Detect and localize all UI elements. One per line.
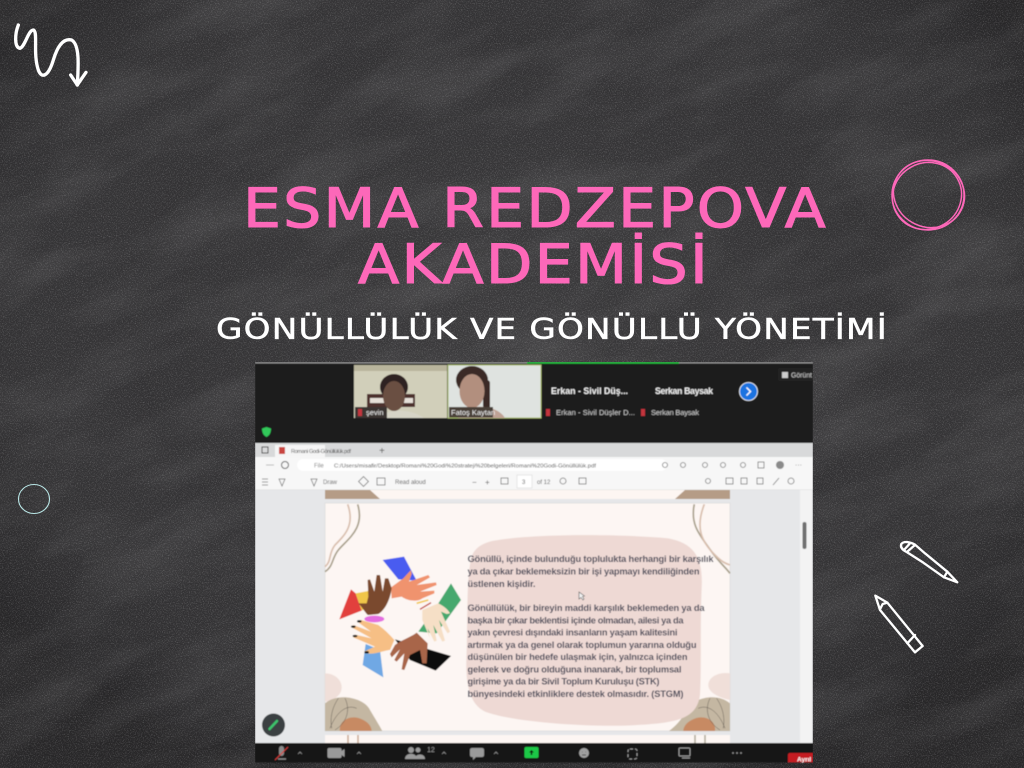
slide definition text: başka bir çıkar beklentisi içinde olmadan, ailesi ya da [468,616,684,626]
leave button: Ayrıl [797,756,811,764]
icon: small teal circle [18,484,50,514]
participant video: sevin [354,365,447,418]
icon: security shield [262,427,271,437]
screenshot: video meeting [255,362,813,764]
slide definition text: düşünülen bir hedefe ulaşmak için, yalnızca içinden [468,652,688,662]
pdf toolbar: − [472,478,477,487]
icon: camera [328,748,344,758]
pdf toolbar: Draw [323,480,338,486]
title: AKADEMİSİ [358,233,710,296]
previous pdf page [325,490,730,499]
icon: muted microphone [275,746,288,760]
participant tile: Serkan Baysak: Serkan Baysak [655,386,713,396]
browser address bar [255,457,813,473]
slide definition text: yakın çevresi dışındaki insanların yaşam kalitesini [468,628,678,638]
slide definition text: ya da çıkar beklemeksizin bir işi yapmayı kendiliğinden [468,566,700,576]
icon: circle of hands [339,557,461,677]
icon: participants: 12 [427,747,435,754]
icon: pen [901,542,957,582]
pdf toolbar: 3 [522,480,526,486]
slide definition text [468,554,714,699]
slide definition text: bünyesindeki etkinliklere destek olmasıdır. (STGM) [468,689,684,699]
participant tile: Erkan [542,365,635,418]
slide definition text: Gönüllülük, bir bireyin maddi karşılık beklemeden ya da [468,603,705,613]
icon: pink scribble circle [880,149,976,242]
browser tab bar [255,443,813,457]
browser address bar: File [314,464,324,470]
leave button [788,753,813,764]
icon: chat [470,748,484,760]
icon: squiggle arrow [16,25,86,85]
icon: participants [405,747,435,759]
icon: pencil [875,596,923,652]
icon: mouse cursor [579,592,584,600]
pdf toolbar: Read aloud [395,480,426,486]
participant tile: Erkan: Erkan - Sivil Düş... [551,386,628,396]
icon: reactions [579,748,589,758]
slide definition text: Gönüllü, içinde bulunduğu toplulukta herhangi bir karşılık [468,554,714,564]
slide definition text: girişime ya da bir Sivil Toplum Kuruluşu (STK) [468,676,660,686]
view button: Görünt [791,372,812,380]
next arrow button [740,382,758,400]
icon: apps [628,749,637,759]
participant video: sevin: şevin [366,408,384,417]
slide decorations [325,504,730,731]
pdf toolbar: of 12 [537,480,551,486]
text blob [466,535,702,726]
more dots [732,752,742,754]
slide definition text: artırmak ya da genel olarak toplumun yararına olduğu [468,640,697,650]
browser address bar: C:/Users/misafir/Desktop/Romani%20Godi%20strateji%20belgeleri/Romani%20Godi-Gönüllülük.pdf [334,464,596,470]
pdf viewer background [255,490,813,743]
browser address bar: ··· [795,462,802,469]
participant tile: Serkan Baysak [638,365,731,418]
participant tile: Erkan: Erkan - Sivil Düşler D... [556,408,635,417]
participant tile: Serkan Baysak: Serkan Baysak [651,408,699,417]
meeting top bar [255,362,813,443]
icon: whiteboard [679,748,690,758]
pdf toolbar [255,473,813,490]
annotate button [262,714,285,736]
participant video: Fatoş Kaytan: Fatoş Kaytan [451,408,495,417]
next pdf page [325,735,730,743]
title: ESMA REDZEPOVA [243,177,828,240]
participant video: Fatoş Kaytan [448,365,541,418]
small carets [298,752,498,754]
subtitle: GÖNÜLLÜLÜK VE GÖNÜLLÜ YÖNETİMİ [216,312,888,346]
browser tab bar: Romani Godi-Gönüllülük.pdf [291,449,351,455]
icon: share screen [524,747,538,758]
pdf toolbar: + [485,478,490,487]
slide definition text: gelerek ve doğru olduğuna inanarak, bir toplumsal [468,664,682,674]
view button [778,368,813,381]
browser tab bar: + [379,446,385,457]
title [243,177,828,296]
pdf slide page [325,503,730,731]
slide definition text: üstlenen kişidir. [468,579,536,589]
meeting control bar [255,743,813,764]
